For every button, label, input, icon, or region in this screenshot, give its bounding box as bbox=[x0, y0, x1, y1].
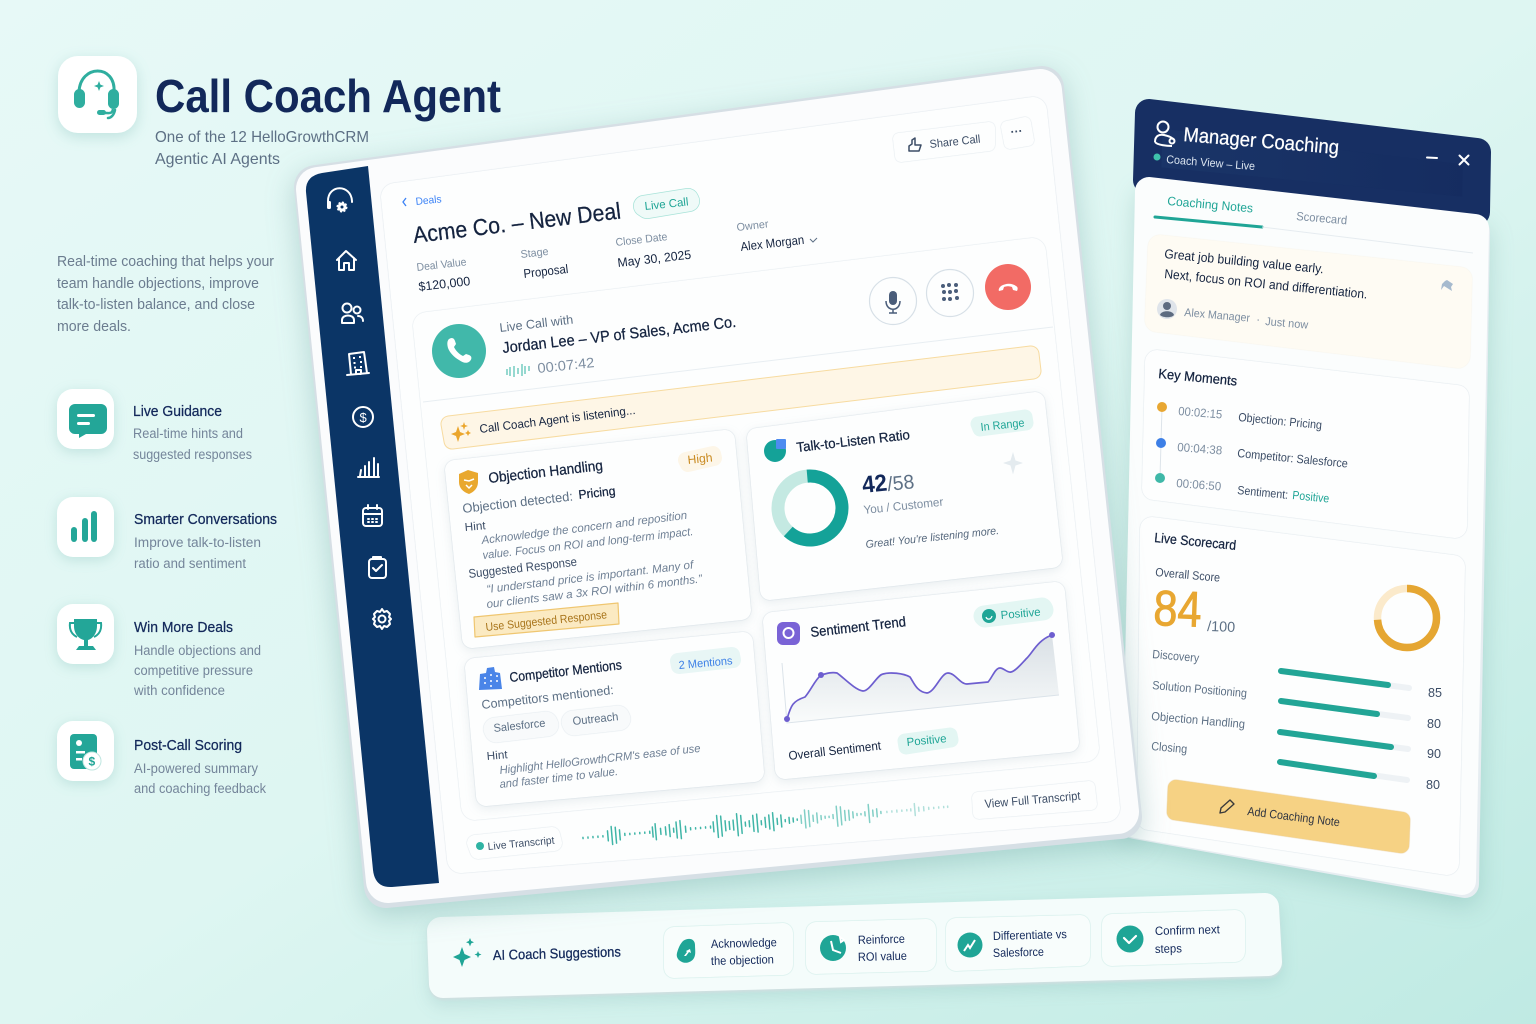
tabs: Scorecard bbox=[1296, 209, 1348, 227]
feature: win more deals: competitive pressure bbox=[134, 663, 253, 678]
positive pill top bbox=[982, 607, 1043, 623]
icon: building bbox=[347, 352, 369, 375]
intro paragraph: more deals. bbox=[57, 318, 131, 335]
chip: differentiate: Differentiate vs bbox=[993, 927, 1067, 943]
feature: live guidance: Live Guidance bbox=[133, 403, 222, 420]
card: talk-to-listen ratio: Talk-to-Listen Ratio bbox=[796, 427, 911, 455]
mentions pill: 2 Mentions bbox=[678, 655, 733, 672]
caller info bbox=[499, 313, 737, 377]
key moments card: 00:04:38 bbox=[1177, 440, 1223, 458]
key moments card: 00:06:50 bbox=[1176, 476, 1222, 494]
card: objection handling bbox=[455, 440, 741, 638]
end call button bbox=[985, 264, 1031, 310]
score ring bbox=[1378, 588, 1436, 648]
competitor hint: and faster time to value. bbox=[499, 766, 619, 791]
icon: bar chart bbox=[57, 497, 114, 557]
header bar bbox=[1147, 113, 1477, 212]
score bars: Solution Positioning bbox=[1152, 678, 1248, 700]
suggested response: our clients saw a 3x ROI within 6 months.” bbox=[486, 573, 704, 611]
icon: calendar bbox=[363, 505, 382, 526]
overall sentiment bbox=[788, 733, 951, 763]
intro paragraph: team handle objections, improve bbox=[57, 275, 259, 292]
icon: window controls bbox=[1427, 156, 1468, 164]
chip: acknowledge: the objection bbox=[711, 952, 774, 968]
view full transcript button: View Full Transcript bbox=[984, 789, 1082, 811]
feature: smarter conversations: ratio and sentiment bbox=[134, 556, 246, 571]
deal fields bbox=[416, 218, 817, 294]
live call card bbox=[423, 252, 1085, 806]
mute button bbox=[870, 278, 916, 324]
key moments card: Objection: Pricing bbox=[1238, 410, 1323, 432]
score bars: Objection Handling bbox=[1151, 709, 1246, 731]
feature: win more deals: with confidence bbox=[133, 683, 225, 698]
chip: acknowledge bbox=[674, 933, 783, 968]
feature: win more deals: Handle objections and bbox=[134, 643, 261, 658]
chip: confirm next steps: steps bbox=[1155, 941, 1182, 956]
key moments card: Positive bbox=[1292, 488, 1330, 506]
card: competitor mentions bbox=[475, 642, 754, 796]
icon: bars bbox=[358, 458, 379, 477]
feature: post-call scoring bbox=[57, 721, 266, 796]
icon: home bbox=[337, 251, 356, 270]
deal fields: Deal Value bbox=[416, 256, 467, 274]
caller info: Jordan Lee – VP of Sales, Acme Co. bbox=[502, 314, 737, 357]
live status: Coach View – Live bbox=[1166, 154, 1255, 173]
icon: shield bbox=[459, 470, 478, 494]
overall sentiment: Overall Sentiment bbox=[788, 738, 882, 763]
content panel bbox=[395, 111, 1106, 859]
positive pill top: Positive bbox=[1000, 607, 1041, 622]
deal title: Acme Co. – New Deal bbox=[412, 197, 622, 248]
logo tile: headset icon bbox=[58, 56, 137, 133]
key moments card bbox=[1154, 362, 1457, 526]
ratio value: 42 bbox=[861, 470, 888, 499]
icon: clipboard bbox=[369, 557, 386, 578]
card: talk-to-listen ratio: Great! You're listening more. bbox=[865, 525, 1000, 551]
score bars: Discovery bbox=[1152, 647, 1200, 665]
subtitle bbox=[155, 129, 369, 168]
key moments card: 00:02:15 bbox=[1178, 404, 1223, 421]
card: objection handling: Pricing bbox=[578, 484, 616, 502]
score bars bbox=[1151, 647, 1442, 792]
coaching note card: · bbox=[1256, 314, 1261, 326]
live scorecard card: Overall Score bbox=[1155, 565, 1221, 585]
sidebar bbox=[306, 166, 439, 887]
coaching note card: Next, focus on ROI and differentiation. bbox=[1164, 266, 1368, 302]
live transcript pill: Live Transcript bbox=[487, 835, 555, 853]
use suggested response button: Use Suggested Response bbox=[485, 609, 608, 634]
feature: smarter conversations: Smarter Conversations bbox=[134, 511, 277, 528]
share call button bbox=[899, 128, 989, 156]
icon: sparkles bbox=[453, 938, 482, 967]
tabs: Coaching Notes bbox=[1167, 194, 1254, 215]
competitor chips: Salesforce bbox=[493, 718, 546, 735]
deal fields: $120,000 bbox=[418, 274, 471, 294]
feature: live guidance: Real-time hints and bbox=[133, 426, 243, 441]
score bars: 85 bbox=[1428, 685, 1442, 700]
feature: win more deals bbox=[57, 604, 261, 698]
icon: pie bbox=[764, 439, 786, 462]
live scorecard card: Live Scorecard bbox=[1154, 530, 1237, 553]
score bars: Closing bbox=[1151, 739, 1188, 756]
overall sentiment: Positive bbox=[906, 733, 947, 749]
deal fields: Owner bbox=[736, 218, 769, 234]
live scorecard card bbox=[1149, 529, 1453, 863]
listening banner: Call Coach Agent is listening... bbox=[479, 403, 636, 436]
ratio value bbox=[861, 470, 944, 517]
competitor hint bbox=[486, 743, 701, 791]
card: sentiment trend bbox=[773, 592, 1069, 769]
suggested response: Suggested Response bbox=[468, 555, 578, 581]
icon: building bbox=[479, 667, 502, 690]
icon: chat bubble bbox=[57, 389, 114, 449]
feature: live guidance: suggested responses bbox=[133, 447, 252, 462]
deal fields: Close Date bbox=[615, 231, 668, 249]
icon: avatar bbox=[1157, 299, 1177, 319]
overall score: /100 bbox=[1207, 619, 1235, 636]
caller info: Live Call with bbox=[499, 313, 574, 335]
card: sentiment trend: Sentiment Trend bbox=[810, 613, 907, 640]
icon: sentiment bbox=[777, 622, 800, 645]
icon: pin bbox=[1441, 280, 1453, 291]
add coaching note button: Add Coaching Note bbox=[1247, 804, 1341, 829]
icon: phone bbox=[432, 324, 486, 378]
feature: smarter conversations bbox=[57, 497, 277, 571]
icon: trophy bbox=[57, 604, 114, 664]
deal fields: May 30, 2025 bbox=[617, 248, 692, 270]
chip: reinforce: ROI value bbox=[858, 949, 907, 964]
chip: confirm next steps bbox=[1112, 920, 1235, 956]
back link bbox=[403, 193, 442, 208]
icon: sidebar headset with gear bbox=[327, 188, 352, 212]
tabs bbox=[1155, 194, 1473, 253]
card: competitor mentions: Competitors mentioned: bbox=[481, 683, 614, 712]
share call button: Share Call bbox=[929, 134, 981, 151]
intro paragraph: Real-time coaching that helps your bbox=[57, 253, 274, 270]
coaching note card: Just now bbox=[1265, 316, 1309, 332]
overall score: 84 bbox=[1153, 580, 1203, 638]
coaching note card bbox=[1157, 246, 1460, 356]
icon: sparkle amber bbox=[451, 422, 471, 442]
competitor chips bbox=[493, 711, 619, 735]
feature: post-call scoring: Post-Call Scoring bbox=[134, 737, 242, 754]
add coaching note button bbox=[1175, 788, 1402, 845]
feature: live guidance bbox=[57, 389, 252, 462]
card: competitor mentions: Competitor Mentions bbox=[509, 657, 623, 685]
competitor hint: Highlight HelloGrowthCRM's ease of use bbox=[499, 743, 701, 777]
intro paragraph: talk-to-listen balance, and close bbox=[57, 296, 255, 313]
audio waveform bbox=[582, 796, 949, 849]
subtitle: Agentic AI Agents bbox=[155, 151, 280, 168]
feature: win more deals: Win More Deals bbox=[134, 619, 233, 636]
coaching note card: Great job building value early. bbox=[1164, 246, 1324, 276]
panel: manager coaching bbox=[1135, 113, 1477, 884]
card: objection handling: Objection Handling bbox=[488, 458, 604, 487]
score bars: 80 bbox=[1426, 777, 1440, 792]
feature: post-call scoring: and coaching feedback bbox=[134, 781, 266, 796]
key moments card: Sentiment: bbox=[1237, 483, 1289, 502]
icon: sparkle bbox=[1003, 452, 1023, 474]
chip: reinforce bbox=[816, 929, 926, 964]
suggested response bbox=[468, 555, 704, 611]
donut chart bbox=[775, 473, 845, 543]
caller info: 00:07:42 bbox=[537, 354, 595, 376]
listening banner bbox=[449, 354, 1033, 442]
in range pill: In Range bbox=[980, 417, 1025, 434]
deal fields: Proposal bbox=[523, 262, 569, 281]
icon: dollar bbox=[353, 407, 373, 427]
heading: AI coach suggestions: AI Coach Suggestions bbox=[493, 943, 621, 963]
feature: smarter conversations: Improve talk-to-listen bbox=[134, 535, 261, 550]
key moments card: Competitor: Salesforce bbox=[1237, 446, 1349, 471]
icon: scorecard: $ bbox=[88, 754, 96, 768]
overall score bbox=[1153, 580, 1235, 638]
score bars: 90 bbox=[1427, 746, 1441, 761]
chip: reinforce: Reinforce bbox=[858, 932, 905, 947]
icon: settings gear bbox=[373, 609, 391, 629]
keypad button bbox=[926, 270, 974, 316]
line chart bbox=[782, 632, 1059, 723]
live call pill: Live Call bbox=[644, 196, 689, 213]
hint text bbox=[464, 510, 694, 562]
severity pill: High bbox=[687, 450, 713, 467]
feature: post-call scoring: AI-powered summary bbox=[134, 761, 258, 776]
deal header bbox=[403, 123, 1028, 294]
deal fields: Stage bbox=[520, 246, 549, 261]
suggested response: “I understand price is important. Many of bbox=[486, 559, 696, 596]
panel: bottom coach suggestions bar bbox=[441, 907, 1268, 984]
back link: Deals bbox=[415, 193, 442, 208]
deal fields: Alex Morgan bbox=[740, 233, 805, 254]
competitor chips: Outreach bbox=[572, 711, 619, 728]
panel: main tablet bbox=[306, 88, 1120, 887]
title: Call Coach Agent bbox=[155, 70, 501, 122]
chip: confirm next steps: Confirm next bbox=[1155, 922, 1221, 938]
chip: differentiate: Salesforce bbox=[993, 945, 1044, 960]
card: talk-to-listen ratio bbox=[757, 402, 1052, 590]
competitor hint: Hint bbox=[486, 749, 509, 763]
hint text: Acknowledge the concern and reposition bbox=[480, 510, 688, 547]
icon: scorecard bbox=[57, 721, 114, 781]
more options button: ··· bbox=[1010, 124, 1023, 139]
card: objection handling: Objection detected: bbox=[462, 489, 574, 516]
icon: manager person bbox=[1155, 122, 1174, 146]
key moments card: Key Moments bbox=[1158, 366, 1238, 389]
hint text: value. Focus on ROI and long-term impact. bbox=[482, 526, 694, 562]
chip: acknowledge: Acknowledge bbox=[711, 935, 777, 951]
hint text: Hint bbox=[464, 520, 487, 534]
chip: differentiate bbox=[956, 925, 1080, 961]
score bars: 80 bbox=[1427, 716, 1441, 731]
header title: Manager Coaching bbox=[1183, 124, 1340, 159]
ratio value: /58 bbox=[886, 471, 915, 496]
more options button bbox=[1007, 123, 1028, 143]
subtitle: One of the 12 HelloGrowthCRM bbox=[155, 129, 369, 146]
coaching note card: Alex Manager bbox=[1184, 307, 1251, 325]
ratio value: You / Customer bbox=[863, 495, 944, 517]
icon: dollar: $ bbox=[360, 410, 368, 425]
icon: people bbox=[342, 304, 363, 323]
intro paragraph bbox=[57, 253, 274, 335]
